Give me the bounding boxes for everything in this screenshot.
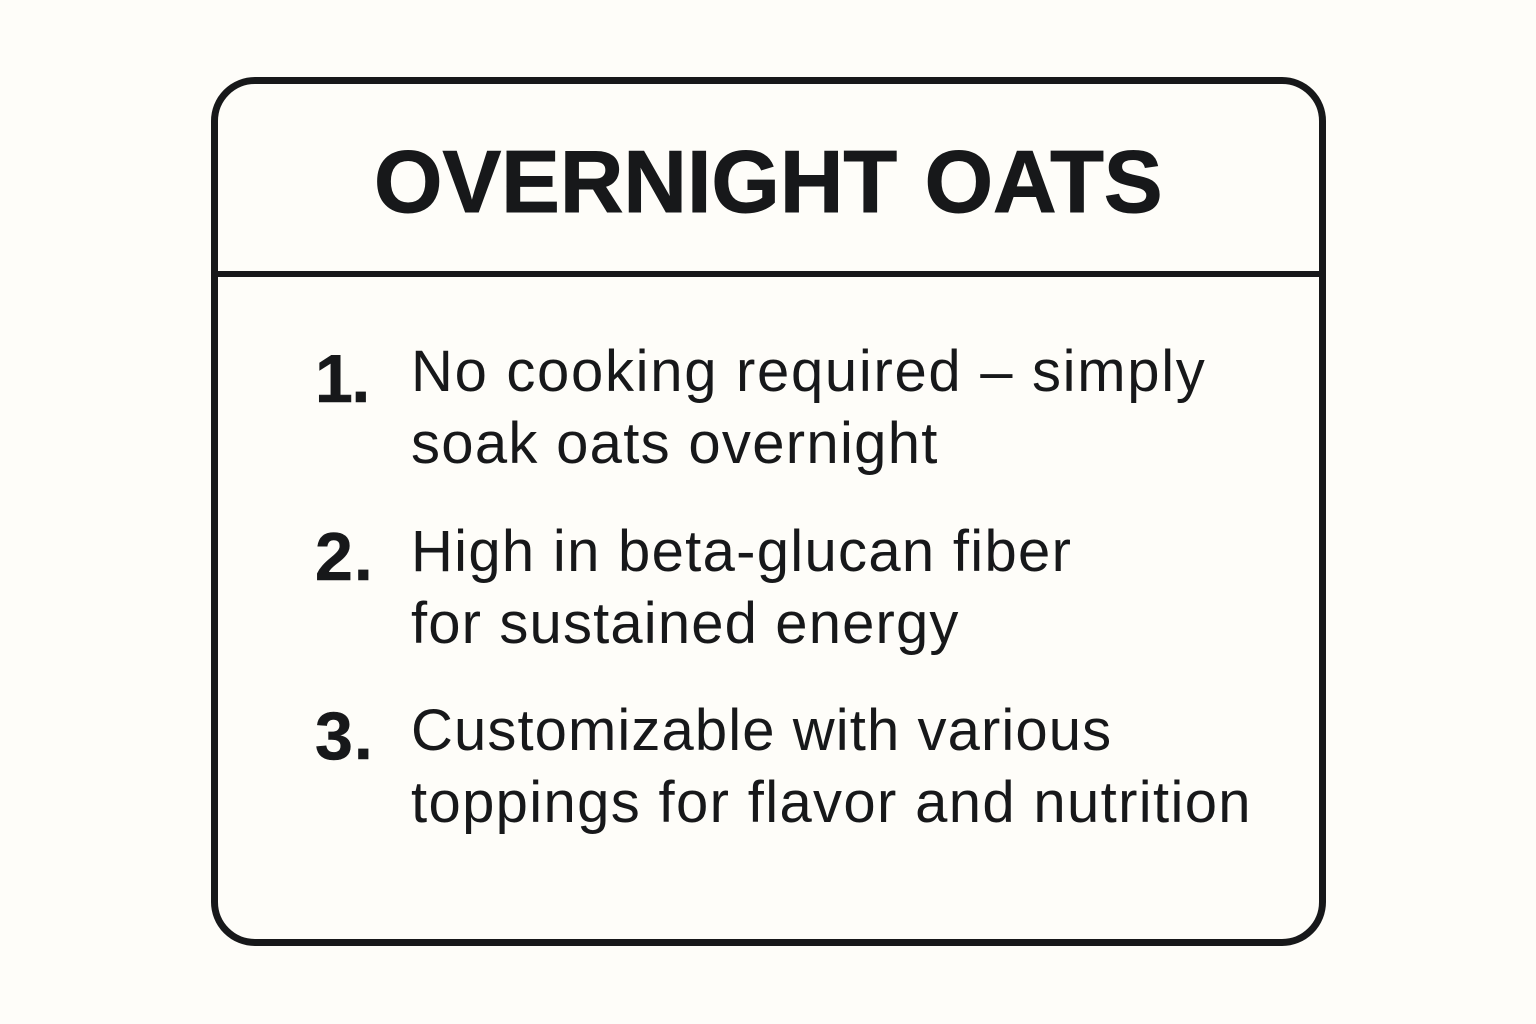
text: item 2: [411, 519, 1072, 656]
text: item 1: No cooking required – simply: [411, 339, 1207, 404]
panel: card: [211, 77, 1326, 946]
title: OVERNIGHT OATS: [374, 132, 1163, 231]
text: item 3: [411, 698, 1252, 835]
text: item 2: for sustained energy: [411, 591, 960, 656]
number 1: 1.: [315, 341, 369, 417]
text: item 3: Customizable with various: [411, 698, 1112, 763]
text: item 1: soak oats overnight: [411, 411, 939, 476]
text: item 1: [411, 339, 1207, 476]
number 3: 3.: [315, 698, 374, 774]
header divider: [215, 271, 1322, 277]
number 2: 2.: [315, 519, 374, 595]
text: item 2: High in beta-glucan fiber: [411, 519, 1072, 584]
text: item 3: toppings for flavor and nutrition: [411, 770, 1252, 835]
